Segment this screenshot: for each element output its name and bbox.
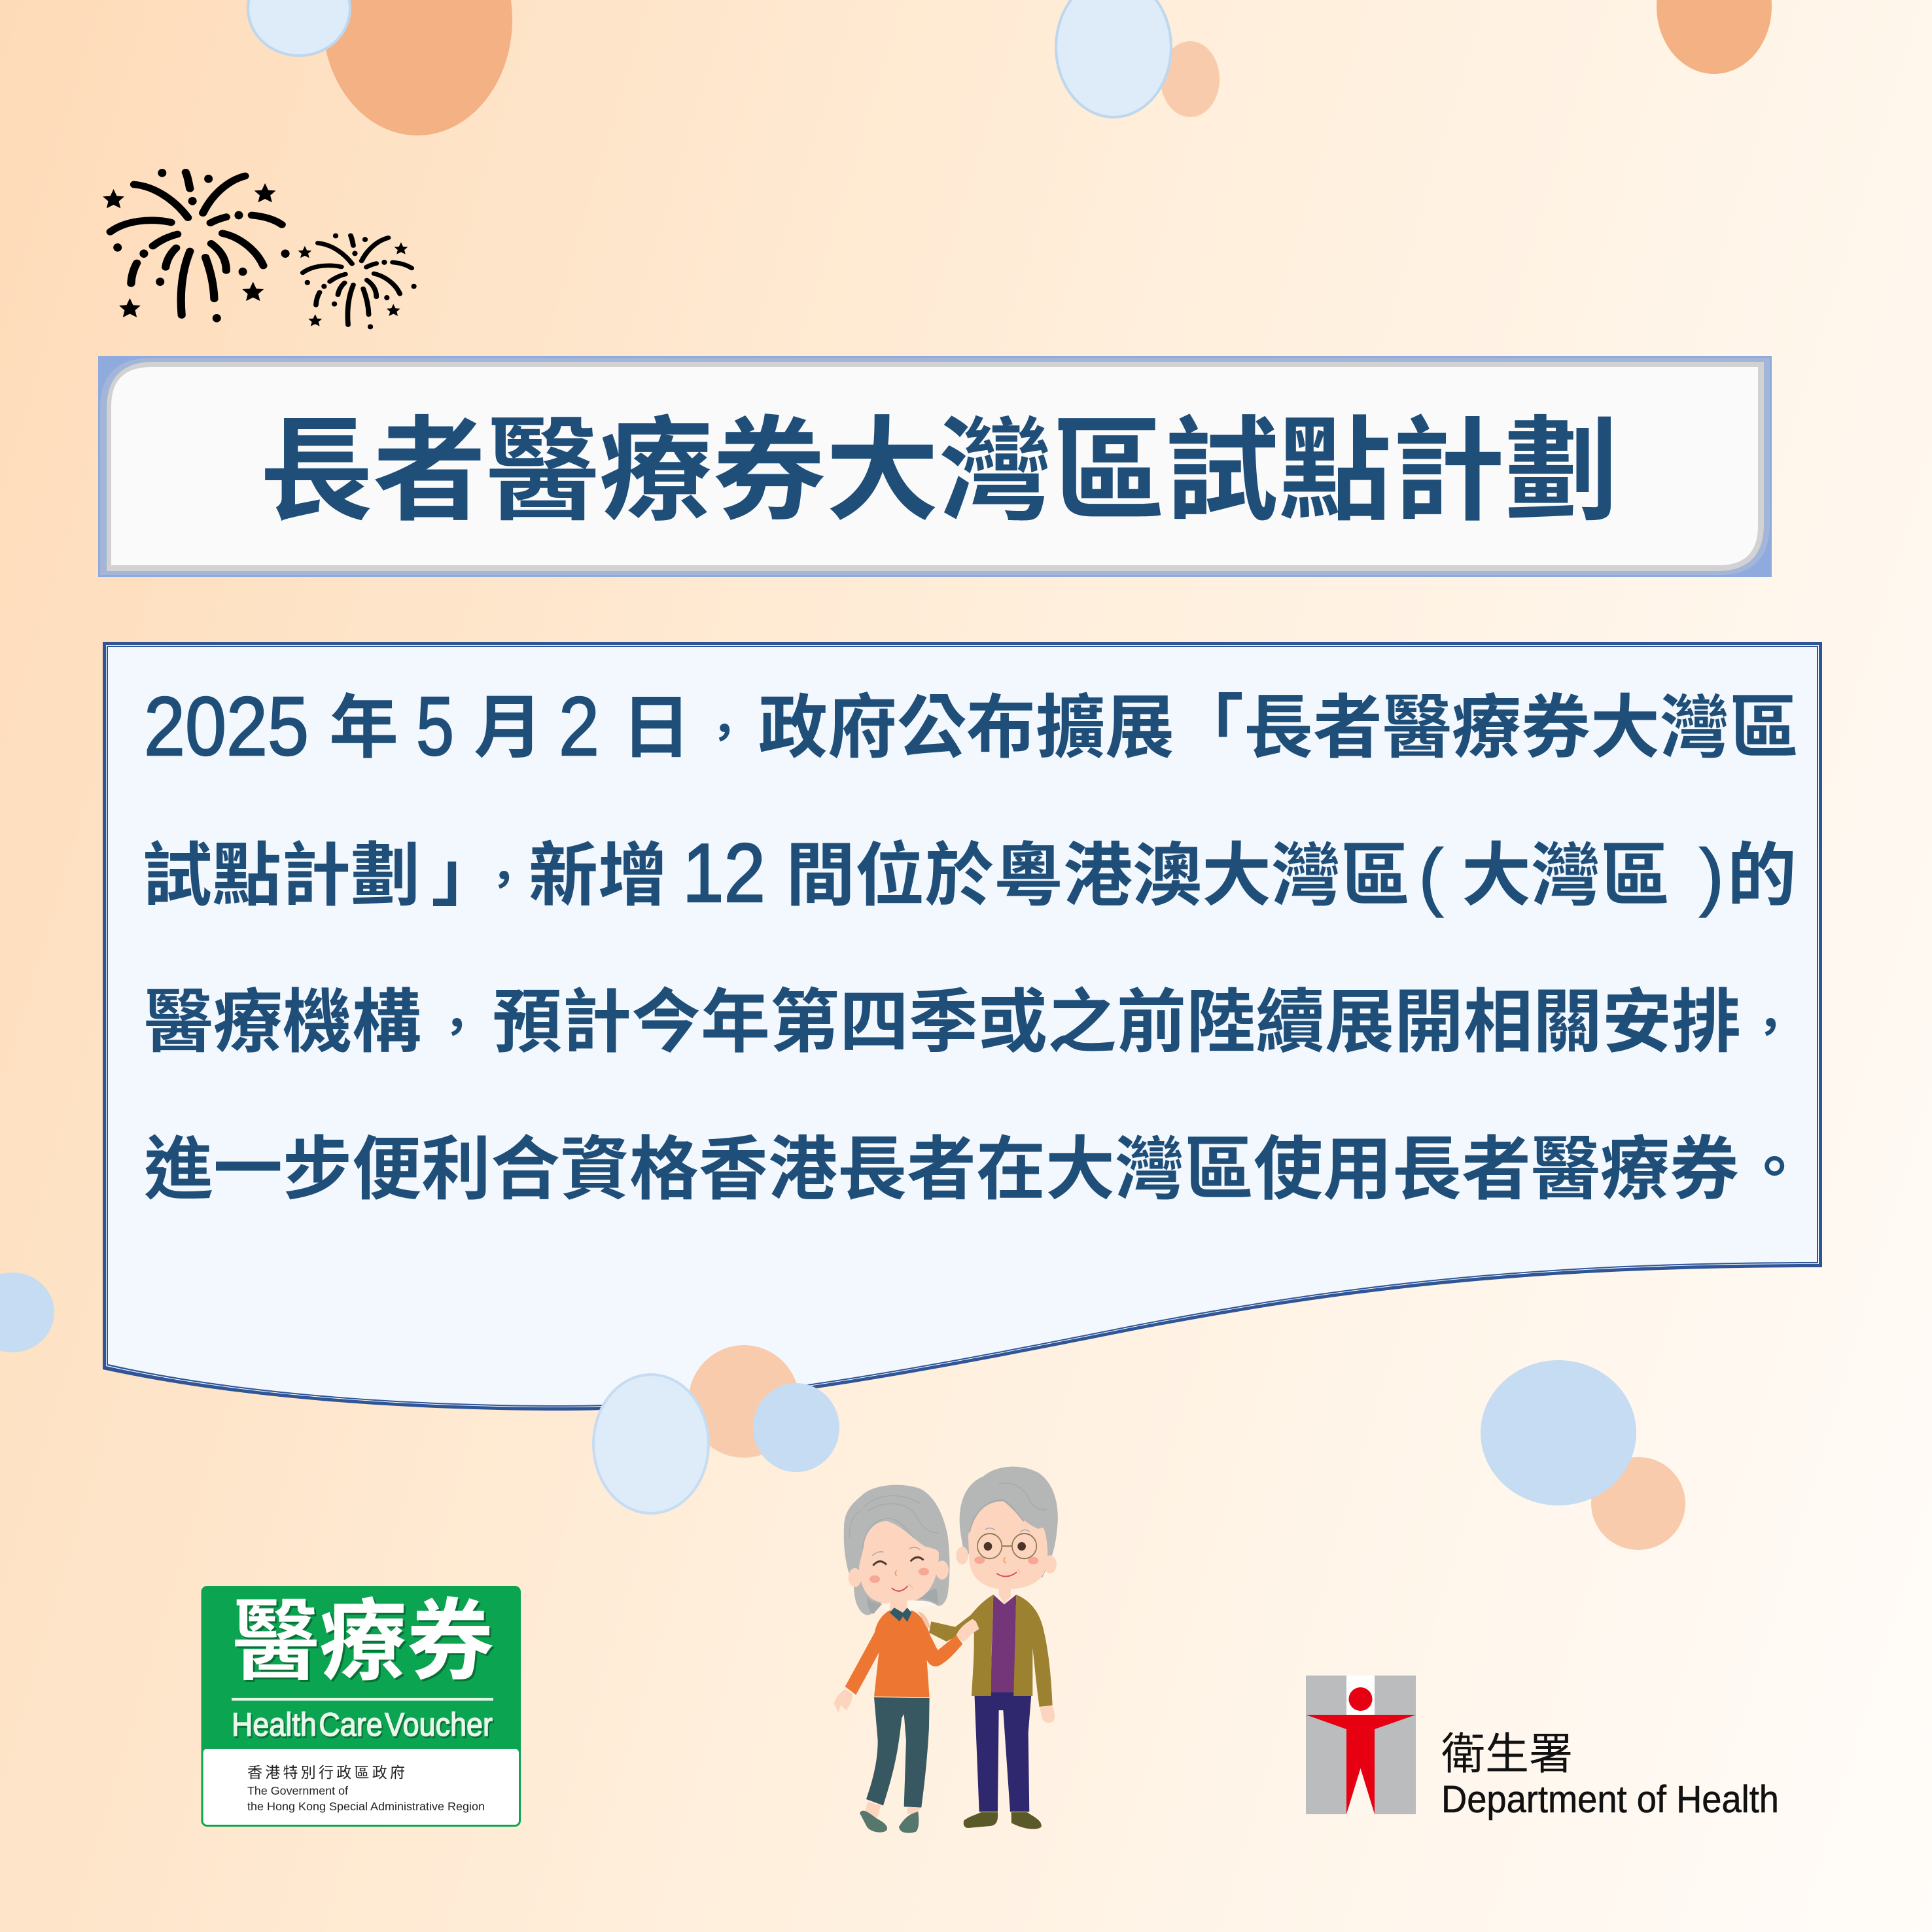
text line 1: 2 xyxy=(559,680,599,773)
department name Chinese: 衛生署 xyxy=(1441,1730,1573,1779)
department name English: Department of Health xyxy=(1441,1778,1779,1821)
text line 3: 醫療機構 xyxy=(144,984,421,1061)
panel: announcement xyxy=(103,642,1822,1411)
text line 1: 年 xyxy=(329,690,398,767)
illustration: elderly couple xyxy=(834,1467,1058,1833)
bubbles: top centre xyxy=(1056,0,1220,117)
text line 4: 進一步便利合資格香港長者在大灣區使用長者醫療券 xyxy=(144,1131,1739,1208)
text line 2: 間位於粵港澳大灣區 xyxy=(786,837,1410,915)
icon: fireworks xyxy=(103,169,417,329)
title text: 長者醫療券大灣區試點計劃 xyxy=(260,408,1618,535)
logo: Department of Health xyxy=(1306,1676,1779,1821)
text line 1: 5 xyxy=(416,680,454,773)
title banner xyxy=(98,356,1772,577)
logo government text: 香港特別行政區政府 xyxy=(247,1764,405,1781)
text line 1 xyxy=(144,680,1799,773)
logo government text: The Government of xyxy=(247,1784,348,1797)
panel frame with wavy bottom xyxy=(103,642,1822,1411)
text line 2: 」 xyxy=(431,837,501,915)
woman xyxy=(834,1485,979,1833)
bubble: left edge xyxy=(0,1273,54,1352)
text line 1: 日 xyxy=(622,690,691,767)
text line 1: 政府公布擴展「長者醫療券大灣區 xyxy=(758,690,1799,767)
logo: Health Care Voucher xyxy=(202,1586,521,1827)
text line 2: ( xyxy=(1418,834,1443,918)
text line 2: ) xyxy=(1699,834,1724,918)
logo mark xyxy=(1306,1676,1416,1814)
bubbles: under panel xyxy=(593,1345,839,1513)
logo English heading: Health Care Voucher xyxy=(232,1706,493,1743)
text line 3: ， xyxy=(1747,1002,1794,1054)
text line 2: ， xyxy=(480,854,527,907)
text line 2: 大灣區 xyxy=(1462,837,1670,915)
text line 2: 的 xyxy=(1727,837,1797,915)
bubble: top right xyxy=(1657,0,1772,74)
logo government text xyxy=(247,1764,485,1813)
text line 3: 預計今年第四季或之前陸續展開相關安排 xyxy=(493,984,1741,1061)
man xyxy=(929,1467,1058,1829)
text line 2: 12 xyxy=(682,826,765,919)
text line 3: ， xyxy=(433,1002,480,1054)
banner frame xyxy=(98,356,1772,577)
bubbles: top left xyxy=(248,0,512,135)
text line 4: 。 xyxy=(1744,1135,1804,1202)
text line 1: 2025 xyxy=(144,680,309,773)
text line 1: 月 xyxy=(474,690,543,767)
text line 1: ， xyxy=(701,707,748,760)
text line 2: 新增 xyxy=(529,837,667,915)
logo Chinese heading: 醫療券 xyxy=(234,1594,496,1693)
logo government text: the Hong Kong Special Administrative Region xyxy=(247,1800,485,1813)
bubbles: lower right xyxy=(1481,1360,1685,1550)
logo Chinese heading: 醫療券 xyxy=(232,1592,494,1691)
text line 2: 試點計劃 xyxy=(143,837,420,915)
logo English heading: Health Care Voucher xyxy=(233,1708,494,1745)
text line 2 xyxy=(143,826,1797,919)
